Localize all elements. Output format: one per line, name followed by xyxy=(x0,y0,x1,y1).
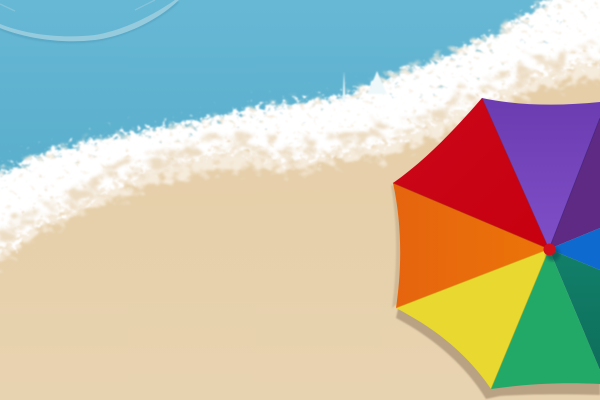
umbrella finial xyxy=(544,244,556,256)
canopy ribs xyxy=(393,98,600,389)
sea foam xyxy=(0,0,600,284)
canopy panel: light purple xyxy=(482,98,600,249)
foam bright layer xyxy=(0,0,600,268)
canopy panel: yellow xyxy=(396,249,549,389)
canopy panel: teal xyxy=(549,249,600,370)
umbrella xyxy=(391,98,600,399)
foam spikes xyxy=(342,71,387,102)
ripple lines in the water xyxy=(0,0,179,42)
umbrella hub shadow xyxy=(546,247,560,261)
canopy panel: dark purple xyxy=(549,118,600,249)
umbrella shadow xyxy=(396,300,600,399)
sea xyxy=(0,0,600,195)
canopy panel: green xyxy=(491,249,600,389)
foam mottling xyxy=(0,35,600,268)
canopy panel: red xyxy=(393,98,549,249)
canopy panel: orange xyxy=(393,183,549,308)
canopy panel: blue xyxy=(549,228,600,270)
foam under layer xyxy=(0,0,600,284)
